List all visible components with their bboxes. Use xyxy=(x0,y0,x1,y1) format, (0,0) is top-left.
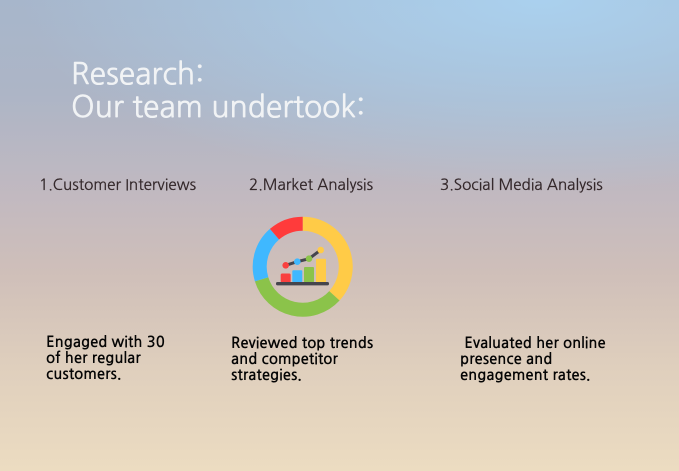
text: social media description: presence and xyxy=(460,352,552,367)
text: customer interviews description xyxy=(46,335,165,382)
title: Our team undertook: xyxy=(71,92,365,122)
title: Research: xyxy=(71,59,204,89)
text: social media description: Evaluated her online xyxy=(464,336,606,351)
text: market analysis description: Reviewed top trends xyxy=(231,336,373,351)
text: market analysis description: strategies. xyxy=(231,368,302,383)
text: market analysis description: and competitor xyxy=(231,352,338,367)
heading: social media analysis: 3.Social Media Analysis xyxy=(440,178,603,193)
text: customer interviews description: customers. xyxy=(46,367,121,382)
text: social media description xyxy=(460,336,606,383)
heading: customer interviews: 1.Customer Interviews xyxy=(39,178,196,193)
text: market analysis description xyxy=(231,336,373,383)
text: customer interviews description: Engaged with 30 xyxy=(46,335,165,350)
text: social media description: engagement rates. xyxy=(460,368,590,383)
title xyxy=(71,59,365,122)
text: customer interviews description: of her regular xyxy=(46,351,141,366)
heading: market analysis: 2.Market Analysis xyxy=(249,178,373,193)
icon: donut ring with bar chart xyxy=(252,216,353,317)
